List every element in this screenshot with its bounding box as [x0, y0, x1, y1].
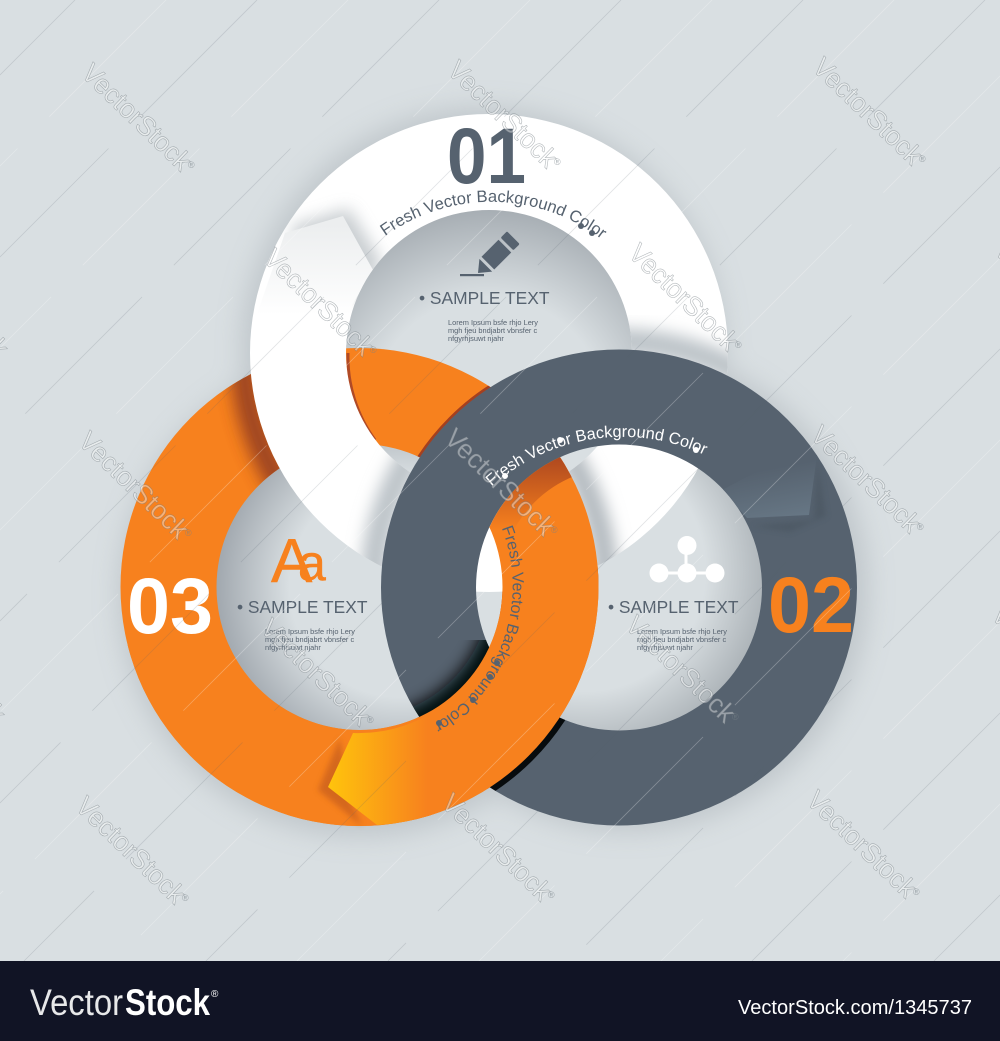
watermark grid: VectorStock [436, 788, 558, 907]
sample text: 02: • SAMPLE TEXT [608, 597, 739, 617]
watermark grid: VectorStock [442, 55, 564, 174]
sample text: 01: Lorem Ipsum bsfe rhjo Lery [448, 318, 538, 327]
watermark grid: VectorStock [255, 613, 377, 732]
watermark grid: ® [917, 522, 924, 532]
watermark grid: ® [182, 893, 189, 903]
number 01: 01 [447, 111, 526, 200]
number 03: 03 [127, 561, 213, 650]
soft ground shadows [120, 109, 867, 835]
watermark grid: VectorStock [807, 52, 929, 171]
sample text: 01: • SAMPLE TEXT [419, 288, 550, 308]
watermark grid: ® [913, 887, 920, 897]
watermark grid: ® [735, 340, 742, 350]
watermark grid: ® [919, 154, 926, 164]
watermark grid: VectorStock [76, 58, 198, 177]
sample text: 02 [608, 597, 739, 652]
folded corner on grey ring [722, 455, 817, 518]
watermark grid: ® [548, 890, 555, 900]
watermark grid: VectorStock [73, 426, 195, 545]
footer logo: ® [211, 989, 219, 1000]
icon: Aa type: A [271, 527, 313, 596]
watermark grid: VectorStock [805, 420, 927, 539]
watermark grid: VectorStock [70, 791, 192, 910]
icon: network nodes [650, 536, 724, 582]
icon: Aa type: a [298, 535, 326, 591]
ring: orange 03 base [120, 348, 598, 826]
sample text: 03: • SAMPLE TEXT [237, 597, 368, 617]
footer logo [30, 982, 219, 1023]
watermark grid: ® [370, 345, 377, 355]
hole: 01 shaded recess [345, 207, 633, 495]
folded corner on white ring [271, 216, 373, 344]
caption filled letter dots: ring 01 [578, 223, 595, 236]
caption filled letter dots: ring 02 [502, 437, 699, 479]
sample text: 02: nfgyrhjsuwt njahr [637, 643, 693, 652]
hole: 03 shaded recess [216, 443, 504, 731]
curved caption: ring 01: Fresh Vector Background Color [380, 190, 606, 238]
watermark grid: VectorStock [801, 785, 923, 904]
footer bar [0, 961, 1000, 1041]
caption filled letter dots: ring 03 [436, 660, 500, 726]
footer logo: Vector [30, 982, 123, 1023]
sample text: 01: nfgyrhjsuwt njahr [448, 334, 504, 343]
sample text: 03 [237, 597, 368, 652]
footer logo: Stock [125, 982, 210, 1023]
curved caption: ring 02: Fresh Vector Background Color [485, 426, 708, 486]
sample text: 03: nfgyrhjsuwt njahr [265, 643, 321, 652]
ring: white 01 [250, 114, 728, 592]
hole: 02 shaded recess [475, 444, 763, 732]
curved caption: ring 03: Fresh Vector Background Color [436, 525, 524, 732]
watermark grid: ® [367, 715, 374, 725]
sample text: 03: mgh fjeu bndjabrt vbnsfer c [265, 635, 354, 644]
number 02: 02 [768, 560, 854, 649]
watermark grid: VectorStock [620, 610, 742, 729]
watermark grid: ® [185, 528, 192, 538]
footer image id: VectorStock.com/1345737 [738, 997, 972, 1019]
ring: orange 03 overlapping front section [128, 457, 598, 827]
orange ribbon tail [328, 722, 470, 825]
watermark grid: ® [732, 712, 739, 722]
watermark grid: ® [551, 525, 558, 535]
watermark grid: VectorStock [623, 238, 745, 357]
ring: dark grey 02 [381, 350, 857, 826]
sample text: 01: mgh fjeu bndjabrt vbnsfer c [448, 326, 537, 335]
watermark grid: ® [554, 157, 561, 167]
sample text: 03: Lorem Ipsum bsfe rhjo Lery [265, 627, 355, 636]
watermark grid: ® [188, 160, 195, 170]
sample text: 02: mgh fjeu bndjabrt vbnsfer c [637, 635, 726, 644]
icon: pencil [460, 231, 520, 279]
watermark grid: VectorStock [439, 423, 561, 542]
watermark grid: VectorStock [258, 243, 380, 362]
sample text: 01 [419, 288, 550, 343]
sample text: 02: Lorem Ipsum bsfe rhjo Lery [637, 627, 727, 636]
